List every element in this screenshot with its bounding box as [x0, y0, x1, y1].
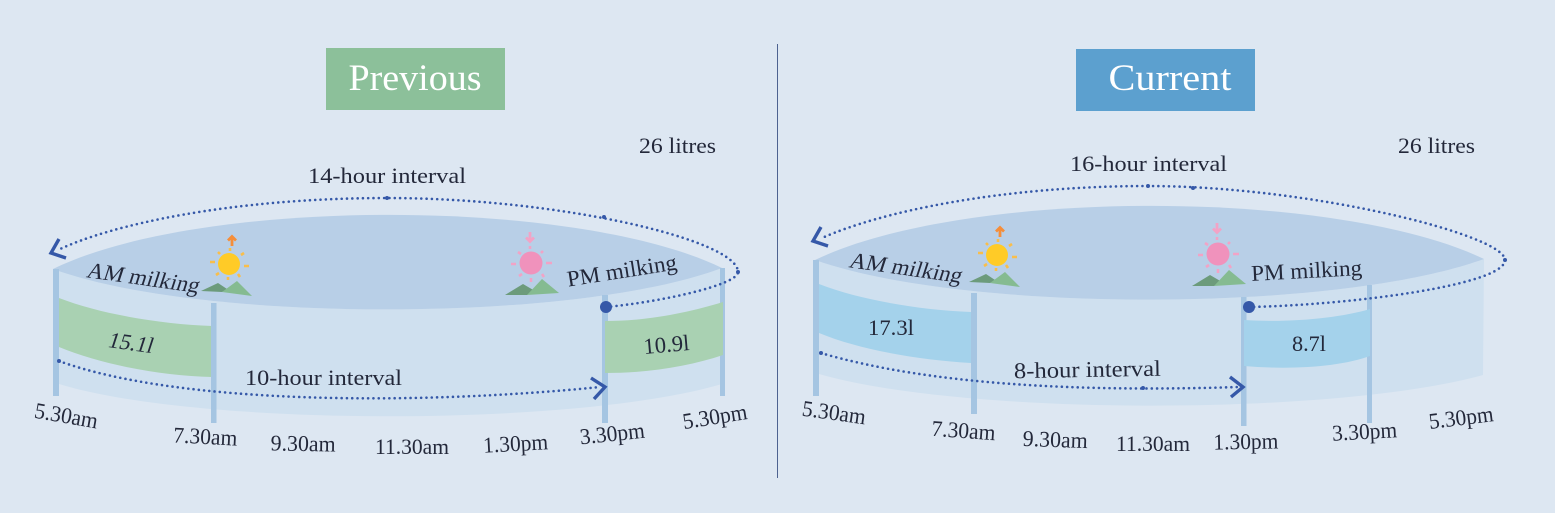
- value: 8.7l: 8.7l: [1292, 331, 1326, 356]
- heading: previous: Previous: [348, 58, 482, 99]
- label: AM milking: AM milking: [84, 258, 204, 298]
- label: 16-hour interval: 16-hour interval: [1070, 151, 1227, 176]
- value: 10.9l: 10.9l: [642, 330, 690, 359]
- tank top: [815, 206, 1484, 300]
- post: 5.30am: [53, 269, 59, 396]
- label: PM milking: PM milking: [565, 250, 679, 292]
- tank body: [53, 268, 722, 416]
- panel: current: [801, 49, 1507, 456]
- arrow: 8-hour interval: [819, 351, 1243, 397]
- label: PM milking: PM milking: [1251, 255, 1363, 286]
- time axis: current: 5.30pm: [1427, 401, 1495, 434]
- post: 7.30am: [971, 293, 977, 414]
- post: 1.30pm: [1241, 297, 1246, 426]
- label: total litres previous: 26 litres: [639, 133, 716, 158]
- time axis: previous: 5.30pm: [681, 399, 749, 434]
- tank top: [53, 215, 722, 309]
- arrow: 16-hour interval: [813, 184, 1507, 313]
- time axis: previous: 9.30am: [270, 430, 336, 457]
- time axis: previous: [33, 398, 749, 459]
- post: 3.30pm: [1367, 285, 1372, 423]
- heading: current: Current: [1108, 58, 1232, 99]
- time axis: current: 11.30am: [1116, 431, 1190, 456]
- post: 5.30pm: [720, 268, 725, 396]
- time axis: previous: 3.30pm: [579, 418, 646, 449]
- PM milk band: [1244, 309, 1370, 368]
- time axis: current: 7.30am: [931, 416, 997, 445]
- label: total litres current: 26 litres: [1398, 133, 1475, 158]
- time axis: current: 1.30pm: [1213, 428, 1279, 455]
- value: 17.3l: 17.3l: [868, 315, 914, 340]
- value: 15.1l: 15.1l: [105, 328, 158, 358]
- panel: previous: [33, 48, 749, 459]
- icon: rising sun: [201, 236, 252, 296]
- AM milk band: [819, 284, 971, 363]
- icon: setting sun: [1192, 223, 1246, 286]
- AM milk band: [59, 298, 212, 377]
- time axis: current: 3.30pm: [1331, 417, 1398, 446]
- tank body: [815, 259, 1484, 406]
- post: 7.30am: [211, 303, 216, 423]
- heading: previous: [326, 48, 505, 110]
- label: AM milking: AM milking: [846, 248, 966, 288]
- icon: rising sun: [969, 228, 1020, 287]
- post: 3.30pm: [602, 295, 608, 423]
- arrow: 10-hour interval: [57, 359, 605, 399]
- time axis: current: [801, 396, 1495, 456]
- PM milk band: [605, 302, 723, 373]
- time axis: current: 9.30am: [1022, 426, 1089, 453]
- label: 14-hour interval: 14-hour interval: [308, 163, 466, 188]
- divider: [777, 44, 778, 478]
- time axis: previous: 1.30pm: [482, 429, 549, 458]
- time axis: previous: 11.30am: [375, 434, 449, 459]
- label: 8-hour interval: 8-hour interval: [1014, 356, 1161, 383]
- time axis: current: 5.30am: [801, 396, 868, 429]
- post: 5.30am: [813, 260, 819, 396]
- heading: current: [1076, 49, 1255, 111]
- time axis: previous: 7.30am: [173, 422, 238, 451]
- time axis: previous: 5.30am: [33, 398, 100, 434]
- icon: setting sun: [505, 232, 559, 295]
- label: 10-hour interval: 10-hour interval: [245, 365, 402, 390]
- arrow: 14-hour interval: [51, 196, 740, 313]
